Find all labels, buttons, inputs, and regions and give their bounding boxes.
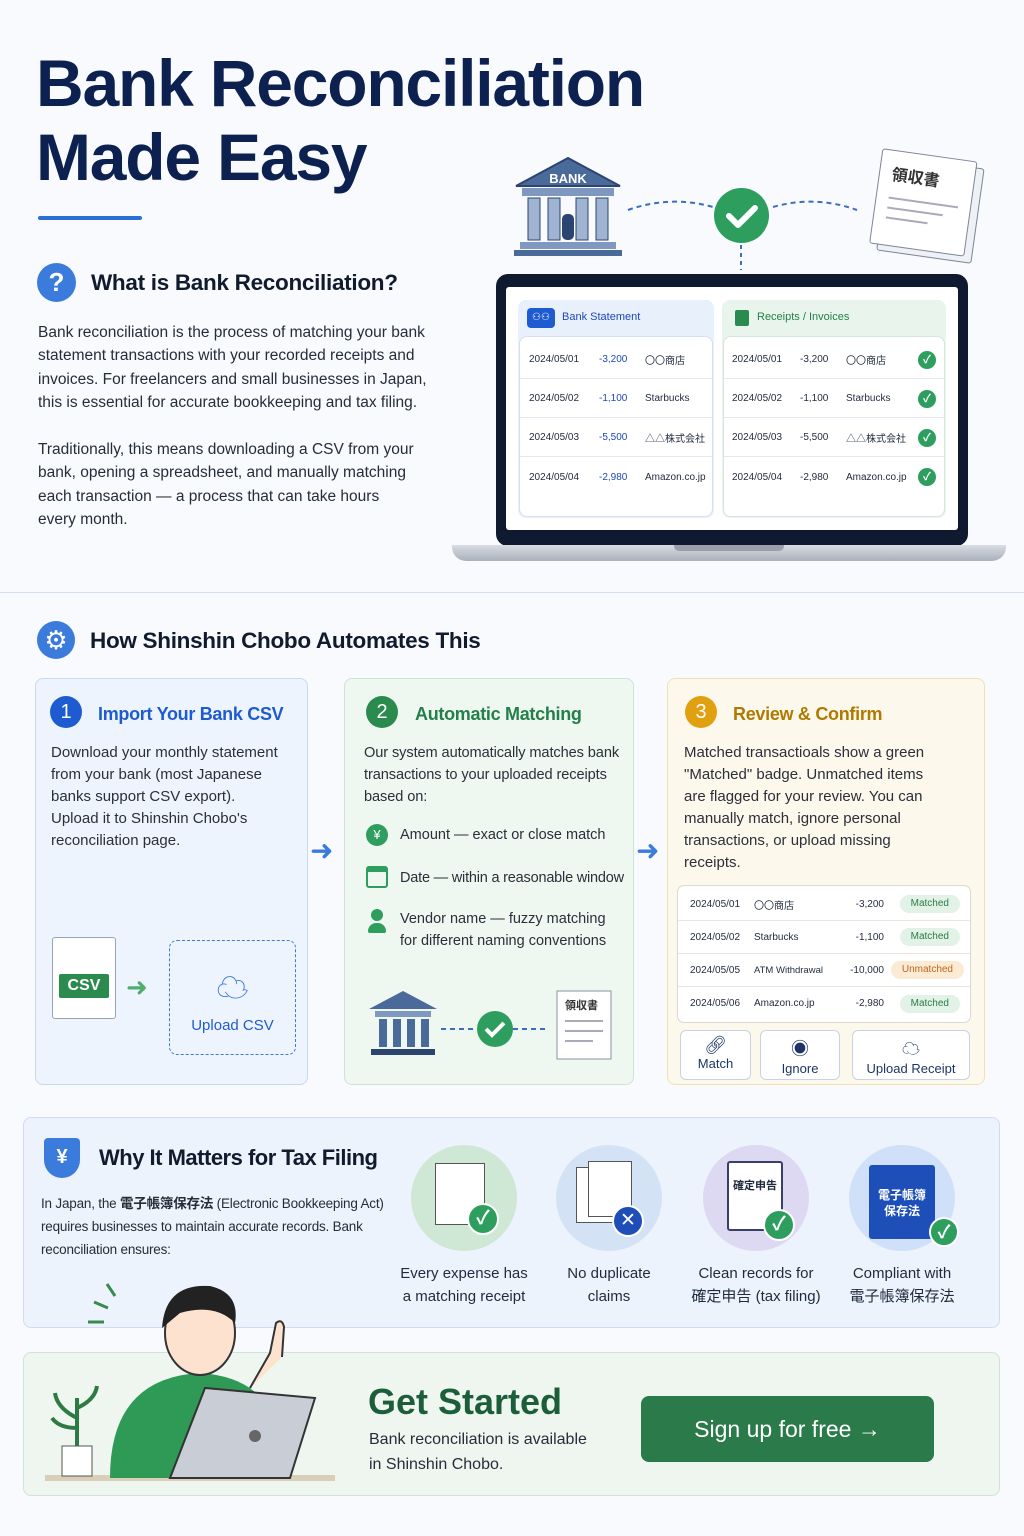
panel: tax filing [23, 1117, 1000, 1328]
panel: step 3: receipts. [684, 854, 741, 871]
panel: receipts: Starbucks [846, 393, 890, 404]
panel: step 3: transactions, or upload missing [684, 832, 891, 849]
panel: step 2: ¥ [373, 827, 381, 842]
panel: step 1: Import Your Bank CSV [98, 704, 283, 724]
panel: bank statement: -3,200 [599, 354, 627, 365]
panel: step 3: 3 [695, 701, 707, 723]
review table: Amazon.co.jp [754, 998, 815, 1009]
panel: tax filing: Compliant with [853, 1265, 951, 1282]
panel: bank statement: Amazon.co.jp [645, 472, 706, 482]
panel: receipts: -5,500 [800, 432, 828, 443]
text block: intro: Traditionally, this means downloading a CSV from your [38, 441, 414, 458]
text block: intro: bank, opening a spreadsheet, and manually matching [38, 464, 406, 481]
panel: tax filing: 電子帳簿保存法 [849, 1288, 954, 1305]
panel: bank statement: 2024/05/02 [529, 393, 579, 404]
icon circles [411, 1145, 517, 1251]
review table: 〇〇商店 [754, 900, 794, 912]
review table: Matched [911, 998, 949, 1008]
panel: tax filing: requires businesses to maintain accurate records. Bank [41, 1219, 363, 1234]
panel: receipts [722, 300, 946, 518]
panel: tax filing: reconciliation ensures: [41, 1242, 171, 1257]
review table: -1,100 [856, 932, 884, 942]
panel: receipts: △△株式会社 [846, 434, 906, 445]
laptop [452, 274, 1006, 561]
buttons [680, 1030, 751, 1080]
arrow: dashed connectors [628, 200, 858, 270]
heading: what is: What is Bank Reconciliation? [91, 270, 398, 295]
panel: bank statement: -1,100 [599, 393, 627, 404]
panel: step 2: for different naming conventions [400, 933, 606, 949]
text block: intro [38, 324, 427, 528]
panel: receipts: -1,100 [800, 393, 828, 404]
panel: bank statement: △△株式会社 [645, 434, 705, 445]
panel: bank statement: -5,500 [599, 432, 627, 443]
text: Upload Receipt [867, 1061, 955, 1076]
panel: tax filing: 確定申告 [733, 1180, 777, 1192]
panel: step 1: reconciliation page. [51, 832, 180, 849]
panel: receipts: -2,980 [800, 472, 828, 482]
panel: step 3: "Matched" badge. Unmatched items [684, 766, 923, 783]
text block: intro: Bank reconciliation is the process of matching your bank [38, 324, 425, 341]
panel: step 1: 1 [60, 701, 72, 723]
title [36, 46, 644, 194]
panel: step 2: transactions to your uploaded receipts [364, 767, 607, 783]
review table: Matched [911, 931, 949, 942]
panel: bank statement: Bank Statement [562, 311, 640, 323]
panel: receipts: 〇〇商店 [846, 356, 886, 367]
icon: question [37, 263, 76, 302]
text block: intro: every month. [38, 511, 128, 528]
arrow: ➜ [636, 835, 659, 866]
panel: receipts: 2024/05/01 [732, 354, 782, 365]
text: ◉ [791, 1039, 809, 1059]
panel: tax filing: claims [588, 1288, 630, 1305]
panel: step 3: manually match, ignore personal [684, 810, 901, 827]
review table: Unmatched [902, 964, 953, 975]
panel: step 2: Date — within a reasonable window [400, 870, 624, 886]
title: Bank Reconciliation [36, 46, 644, 120]
review table: 2024/05/05 [690, 964, 740, 976]
icon circles: ✓ [476, 1208, 490, 1229]
icon: check [714, 188, 769, 243]
text block: intro: invoices. For freelancers and small businesses in Japan, [38, 371, 427, 388]
review table: ATM Withdrawal [754, 964, 823, 976]
icon: gear [37, 621, 75, 659]
heading: how: How Shinshin Chobo Automates This [90, 628, 481, 653]
review table: Matched [911, 898, 949, 909]
panel: step 3: Matched transactioals show a green [684, 744, 924, 761]
panel: step 1: Download your monthly statement [51, 744, 278, 761]
arrow: ➜ [310, 835, 333, 866]
panel: tax filing: 確定申告 (tax filing) [691, 1288, 821, 1305]
panel: receipts: Receipts / Invoices [757, 311, 849, 323]
review table [677, 885, 971, 1023]
panel: step 2: Vendor name — fuzzy matching [400, 911, 606, 927]
review table: 2024/05/06 [690, 998, 740, 1009]
review table: Starbucks [754, 932, 798, 942]
panel: tax filing: ✕ [620, 1210, 636, 1231]
panel: tax filing: No duplicate [567, 1265, 651, 1282]
review table: 2024/05/01 [690, 898, 740, 910]
panel: tax filing: ✓ [772, 1214, 786, 1235]
button: sign up: Sign up for free → [694, 1416, 881, 1442]
panel: step 1: ➜ [126, 972, 148, 1002]
panel: step 1: Upload it to Shinshin Chobo's [51, 810, 247, 827]
icon: shield: ¥ [56, 1146, 68, 1168]
title: Made Easy [36, 120, 366, 194]
panel: get started [23, 1352, 1000, 1496]
upload box [169, 940, 296, 1055]
panel: step 3: are flagged for your review. You can [684, 788, 922, 805]
panel: receipts: ✓ [923, 471, 931, 483]
panel: tax filing: 電子帳簿 [878, 1188, 926, 1202]
panel: receipts: 2024/05/03 [732, 432, 782, 443]
panel: step 2: based on: [364, 789, 427, 805]
buttons: Match [698, 1056, 733, 1071]
panel: receipts: 2024/05/02 [732, 393, 782, 404]
buttons: 🔗︎ [704, 1035, 727, 1055]
panel: receipts: ✓ [923, 392, 931, 404]
text: ☁ [902, 1039, 920, 1059]
panel: receipts: -3,200 [800, 354, 828, 365]
panel: tax filing: Clean records for [698, 1265, 814, 1282]
labels [400, 1265, 528, 1305]
icon: shield [44, 1138, 80, 1178]
panel: tax filing: In Japan, the 電子帳簿保存法 (Electronic Bookkeeping Act) [41, 1196, 384, 1211]
review table: -2,980 [856, 998, 884, 1009]
text: Ignore [782, 1061, 818, 1076]
icon: gear: ⚙ [44, 625, 68, 655]
icon: bank: BANK [549, 171, 587, 186]
panel: tax filing: ✓ [937, 1222, 950, 1242]
icon: question: ? [49, 267, 64, 297]
panel: bank statement: ⚇⚇ [532, 312, 550, 323]
panel: step 3 [667, 678, 985, 1085]
panel: receipts: ✓ [923, 432, 931, 444]
panel: receipts: ✓ [923, 354, 931, 366]
icon row [369, 990, 612, 1060]
panel: step 1: from your bank (most Japanese [51, 766, 262, 783]
panel: step 2 [344, 678, 634, 1085]
panel: step 2: Amount — exact or close match [400, 827, 606, 843]
panel: get started: in Shinshin Chobo. [369, 1456, 503, 1473]
icon row: 領収書 [565, 997, 598, 1013]
panel: step 1: banks support CSV export). [51, 788, 235, 805]
panel: bank statement [518, 300, 714, 518]
icon: csv file [52, 937, 116, 1019]
panel: bank statement: 2024/05/03 [529, 432, 579, 443]
panel: tax filing: 保存法 [884, 1204, 920, 1218]
panel: step 2: Our system automatically matches bank [364, 745, 619, 761]
illustration: person with laptop [45, 1283, 335, 1481]
panel: receipts: 2024/05/04 [732, 472, 782, 482]
upload box: ☁ [216, 970, 248, 1006]
panel: bank statement: -2,980 [599, 472, 627, 482]
review table: -10,000 [850, 964, 884, 976]
labels: Every expense has [400, 1265, 528, 1282]
panel: step 1 [35, 678, 308, 1085]
icon: bank [514, 156, 622, 256]
icon: receipt doc: 領収書 [891, 167, 941, 190]
panel: step 2: 2 [376, 701, 388, 723]
panel: bank statement: 2024/05/04 [529, 472, 579, 482]
button: sign up [641, 1396, 934, 1462]
panel: receipts: Amazon.co.jp [846, 472, 907, 482]
panel: step 3: Review & Confirm [733, 704, 882, 724]
review table: 2024/05/02 [690, 932, 740, 942]
icon: receipt doc [870, 148, 984, 264]
panel: bank statement: 2024/05/01 [529, 354, 579, 365]
text block: intro: statement transactions with your recorded receipts and [38, 347, 414, 364]
text block: intro: each transaction — a process that can take hours [38, 488, 379, 505]
text block: intro: this is essential for accurate bookkeeping and tax filing. [38, 394, 417, 411]
panel: step 2: Automatic Matching [415, 704, 582, 724]
panel: tax filing: Why It Matters for Tax Filing [99, 1145, 377, 1170]
icon: csv file: CSV [68, 977, 100, 994]
upload box: Upload CSV [191, 1017, 274, 1034]
review table: -3,200 [856, 898, 884, 910]
panel: bank statement: 〇〇商店 [645, 356, 685, 367]
panel: bank statement: Starbucks [645, 393, 689, 404]
labels: a matching receipt [403, 1288, 525, 1305]
panel: get started: Get Started [368, 1381, 562, 1422]
panel: get started: Bank reconciliation is available [369, 1431, 587, 1448]
